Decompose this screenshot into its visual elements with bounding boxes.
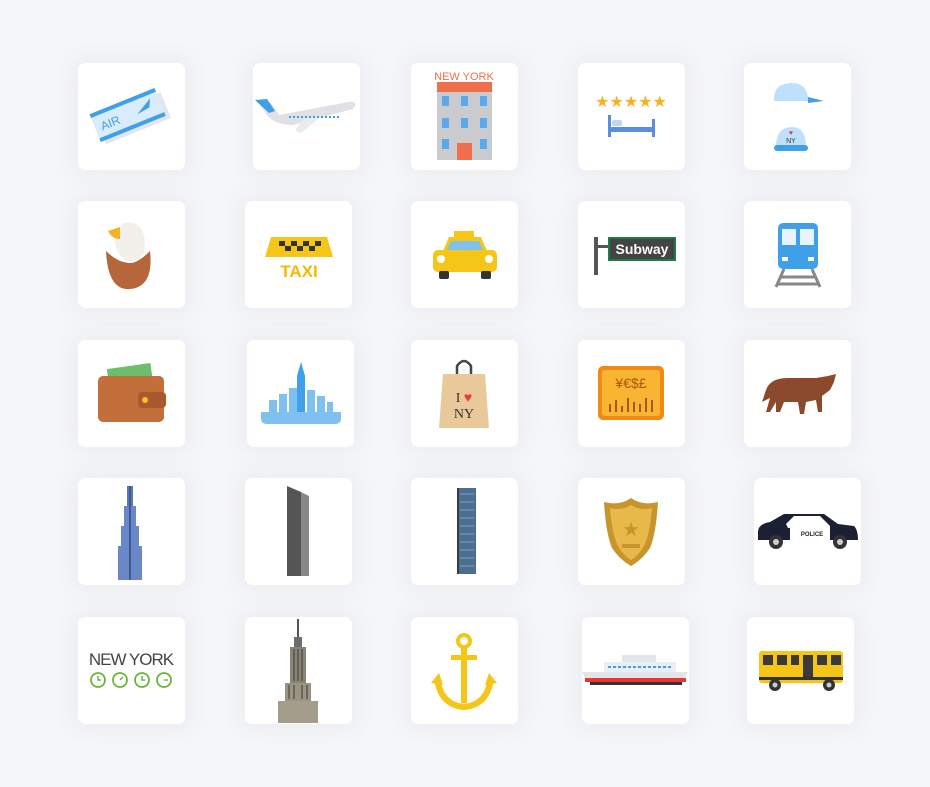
card: school bus <box>747 617 854 724</box>
card: currency board <box>578 340 685 447</box>
card: subway sign <box>578 201 685 308</box>
card: police badge <box>578 478 685 585</box>
card: wallet <box>78 340 185 447</box>
card: train <box>744 201 851 308</box>
card: airplane <box>253 63 360 170</box>
card: taxi sign <box>245 201 352 308</box>
card: bull <box>744 340 851 447</box>
card: taxi sign: TAXI <box>280 262 318 281</box>
card: grey tower <box>245 478 352 585</box>
card: new york clocks <box>78 617 185 724</box>
card: subway sign: Subway <box>616 241 669 257</box>
card: caps: NY <box>786 138 796 145</box>
card: air ticket: AIR <box>99 113 123 133</box>
card: taxi car <box>411 201 518 308</box>
card: five star bed <box>578 63 685 170</box>
card: glass tower <box>411 478 518 585</box>
card: caps <box>744 63 851 170</box>
card: tower stepped <box>78 478 185 585</box>
card: ship <box>582 617 689 724</box>
card: skyline <box>247 340 354 447</box>
card: shopping bag: I ♥ <box>456 391 472 406</box>
card: hotel: NEW YORK <box>434 71 495 83</box>
card: currency board: ¥€$£ <box>614 375 647 391</box>
card: police badge: ★ <box>622 519 640 541</box>
card: anchor <box>411 617 518 724</box>
card: new york clocks: NEW YORK <box>89 650 175 669</box>
card: shopping bag: NY <box>454 407 474 422</box>
card: air ticket <box>78 63 185 170</box>
card: police car <box>754 478 861 585</box>
card: police car: POLICE <box>801 532 823 538</box>
card: caps: ♥ <box>789 130 793 137</box>
card: five star bed: ★★★★★ <box>595 94 667 111</box>
card: shopping bag <box>411 340 518 447</box>
card: empire state <box>245 617 352 724</box>
card: eagle <box>78 201 185 308</box>
card: hotel <box>411 63 518 170</box>
